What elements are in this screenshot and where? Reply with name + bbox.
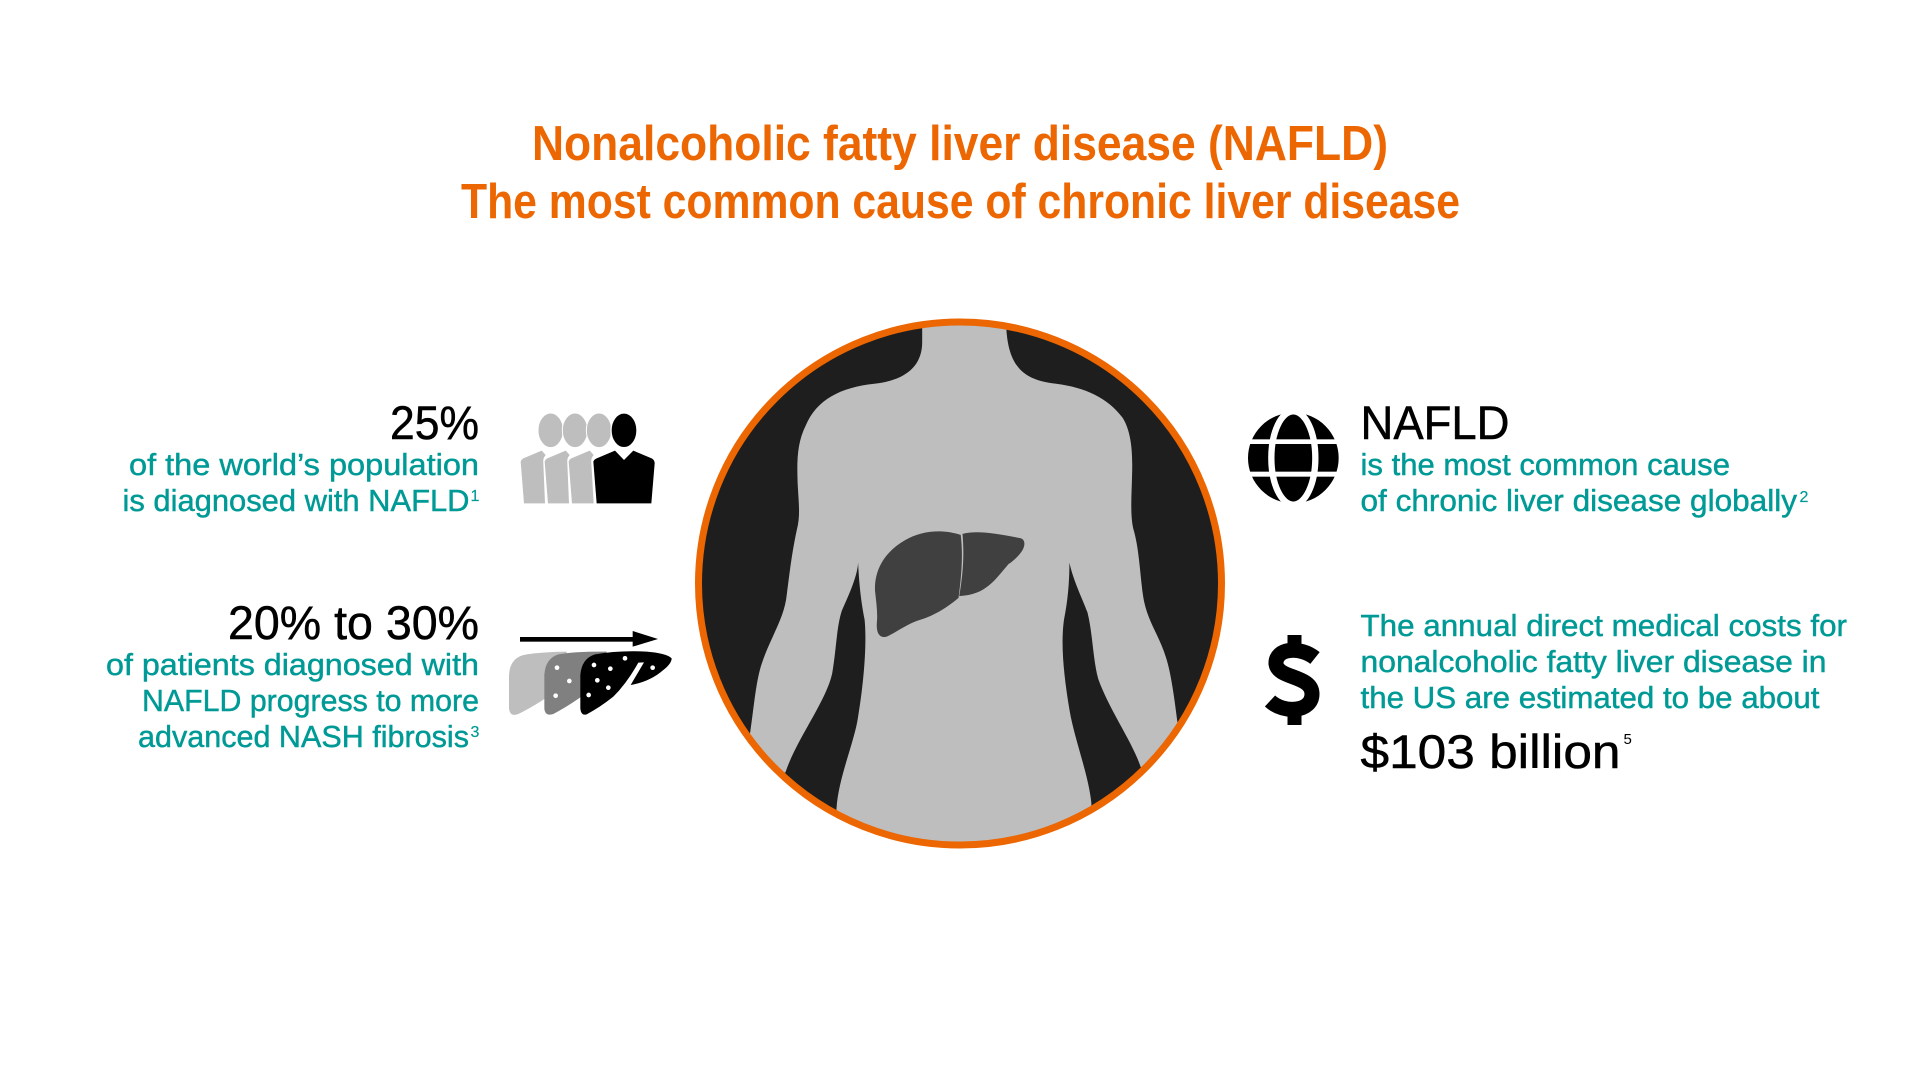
text: progression: NAFLD progress to more [142,683,479,718]
text: global cause: is the most common cause [1360,447,1730,482]
body silhouette [750,326,1178,842]
title: Nonalcoholic fatty liver disease (NAFLD) [532,117,1388,171]
panel: annual costs [1270,608,1847,778]
text: progression [106,647,480,754]
panel: NAFLD global cause [1245,396,1808,518]
panel: 20% to 30% progress [106,596,672,754]
panel: 25% of world population [122,396,655,518]
icon: people [521,413,655,503]
stat: 25%: 25% [390,396,479,449]
liver [875,531,1024,637]
text: progression: advanced NASH fibrosis [138,719,469,754]
title: The most common cause of chronic liver disease [461,175,1460,229]
text: world population: 1 [470,488,480,505]
text: progression: 3 [470,724,480,741]
text: world population [122,447,480,518]
title [461,117,1460,229]
stat: $103 billion: $103 billion [1360,725,1620,778]
text: costs [1360,608,1847,715]
text: world population: of the world’s population [129,447,479,482]
text: global cause: of chronic liver disease globally [1360,483,1797,518]
panel: torso illustration in circle [698,317,1222,864]
stat: 20% to 30%: 20% to 30% [228,596,479,649]
text: world population: is diagnosed with NAFLD [122,483,470,518]
text: costs: the US are estimated to be about [1360,680,1820,715]
text: progression: of patients diagnosed with [106,647,479,682]
text: global cause [1360,447,1808,518]
stat: $103 billion: 5 [1624,731,1632,748]
text: costs: The annual direct medical costs for [1360,608,1847,643]
heading: NAFLD: NAFLD [1360,396,1510,449]
icon: dollar sign [1270,635,1315,725]
text: global cause: 2 [1800,489,1808,506]
icon: globe [1245,411,1342,505]
text: costs: nonalcoholic fatty liver disease in [1360,644,1826,679]
icon: arrow and livers [509,631,672,715]
